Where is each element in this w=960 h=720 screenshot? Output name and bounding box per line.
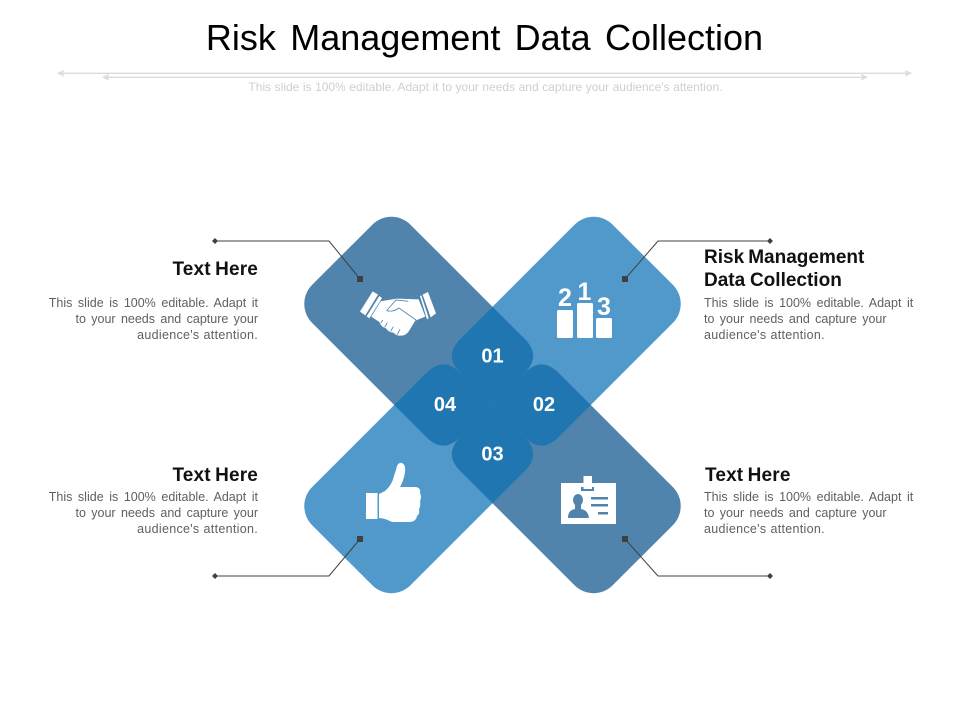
- leader line: bottom-right: [622, 536, 773, 579]
- text block: top-right: Data Collection: [704, 270, 842, 291]
- subtitle: This slide is 100% editable. Adapt it to your needs and capture your audience's attention.: [248, 80, 723, 94]
- text block: bottom-left: This slide is 100% editable. Adapt it: [49, 490, 259, 504]
- number 03: 03: [481, 444, 504, 466]
- icon: podium: 3: [597, 293, 611, 321]
- petal 03: [443, 405, 542, 503]
- text block: bottom-left: audience's attention.: [137, 522, 258, 536]
- text block: top-left: to your needs and capture your: [75, 312, 258, 326]
- text block: top-left: Text Here: [172, 259, 258, 280]
- arm: bottom-left light: [293, 356, 542, 604]
- icon: podium: 2: [558, 284, 572, 312]
- leader line: top-left: [212, 238, 363, 282]
- petal 02: [492, 356, 591, 454]
- header arrow divider: lower: [102, 74, 868, 81]
- arm: bottom-right dark: [443, 356, 692, 604]
- text block: top-right: Risk Management: [704, 247, 865, 268]
- text block: top-right: to your needs and capture your: [704, 312, 887, 326]
- arm: top-right light: [443, 206, 692, 454]
- number 04: 04: [434, 394, 457, 416]
- icon: podium: 1: [578, 278, 592, 306]
- icon: handshake: [360, 291, 436, 336]
- title: Risk Management Data Collection: [206, 17, 763, 58]
- text block: bottom-left: Text Here: [172, 465, 258, 486]
- text block: bottom-right: Text Here: [705, 465, 791, 486]
- text block: bottom-right: to your needs and capture your: [704, 506, 887, 520]
- petal 04: [394, 356, 492, 454]
- icon: id badge: [561, 476, 616, 524]
- leader line: top-right: [622, 238, 773, 282]
- arm: top-left dark: [293, 206, 542, 454]
- icon: thumbs up: [366, 463, 421, 522]
- text block: bottom-right: [704, 465, 914, 536]
- leader line: bottom-left: [212, 536, 363, 579]
- number 02: 02: [533, 394, 555, 416]
- petal 01: [443, 307, 542, 405]
- text block: bottom-right: audience's attention.: [704, 522, 825, 536]
- text block: top-left: audience's attention.: [137, 328, 258, 342]
- number 01: 01: [481, 346, 504, 368]
- text block: bottom-left: to your needs and capture your: [75, 506, 258, 520]
- text block: bottom-right: This slide is 100% editable. Adapt it: [704, 490, 914, 504]
- cross diagram: [293, 206, 692, 604]
- text block: top-right: This slide is 100% editable. Adapt it: [704, 296, 914, 310]
- text block: bottom-left: [49, 465, 259, 536]
- header arrow divider: upper: [57, 70, 912, 77]
- icon: podium: [557, 278, 612, 338]
- text block: top-left: [49, 259, 259, 342]
- text block: top-right: audience's attention.: [704, 328, 825, 342]
- text block: top-right: [704, 247, 914, 342]
- text block: top-left: This slide is 100% editable. Adapt it: [49, 296, 259, 310]
